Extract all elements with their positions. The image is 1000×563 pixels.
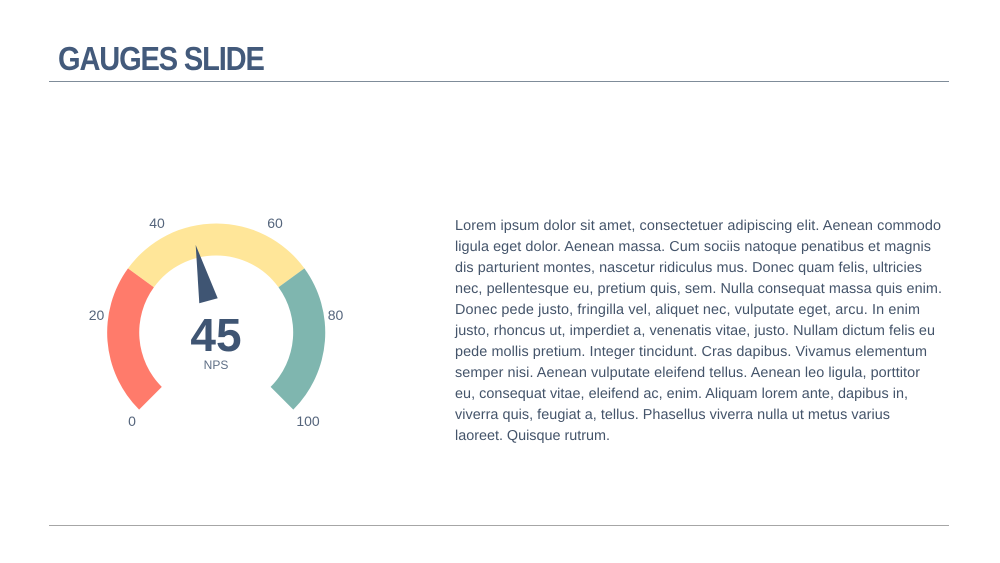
body paragraph [454,218,942,444]
title: GAUGES SLIDE [58,40,264,77]
body paragraph: laoreet. Quisque rutrum. [455,428,610,444]
scale labels: 60 [267,215,283,231]
body paragraph: semper nisi. Aenean vulputate eleifend tellus. Aenean leo ligula, porttitor [455,365,920,381]
bottom rule [49,525,949,526]
body paragraph: eu, consequat vitae, eleifend ac, enim. Aliquam lorem ante, dapibus in, [455,386,908,402]
gauge value: 45 [190,309,242,361]
scale labels: 80 [328,307,343,323]
scale labels: 0 [128,413,136,429]
body paragraph: Donec pede justo, fringilla vel, aliquet nec, vulputate eget, arcu. In enim [455,302,920,318]
body paragraph: nec, pellentesque eu, pretium quis, sem. Nulla consequat massa quis enim. [455,281,942,297]
scale labels: 20 [89,307,104,323]
body paragraph: ligula eget dolor. Aenean massa. Cum sociis natoque penatibus et magnis [455,239,931,255]
body paragraph: pede mollis pretium. Integer tincidunt. Cras dapibus. Vivamus elementum [455,344,927,360]
needle [196,245,218,303]
body paragraph: viverra quis, feugiat a, tellus. Phasellus viverra nulla ut metus varius [455,407,890,423]
body paragraph: dis parturient montes, nascetur ridiculus mus. Donec quam felis, ultricies [455,260,922,276]
gauge metric label: NPS [204,358,228,372]
gauge segment: yellow 30-70 [128,223,304,287]
top rule [49,81,949,82]
gauge segment: teal 70-100 [271,268,325,410]
scale labels: 40 [149,215,165,231]
scale labels: 100 [296,413,320,429]
body paragraph: Lorem ipsum dolor sit amet, consectetuer adipiscing elit. Aenean commodo [455,218,941,234]
body paragraph: justo, rhoncus ut, imperdiet a, venenatis vitae, justo. Nullam dictum felis eu [454,323,935,339]
gauge segment: red 0-30 [107,268,162,410]
scale labels [89,215,343,429]
